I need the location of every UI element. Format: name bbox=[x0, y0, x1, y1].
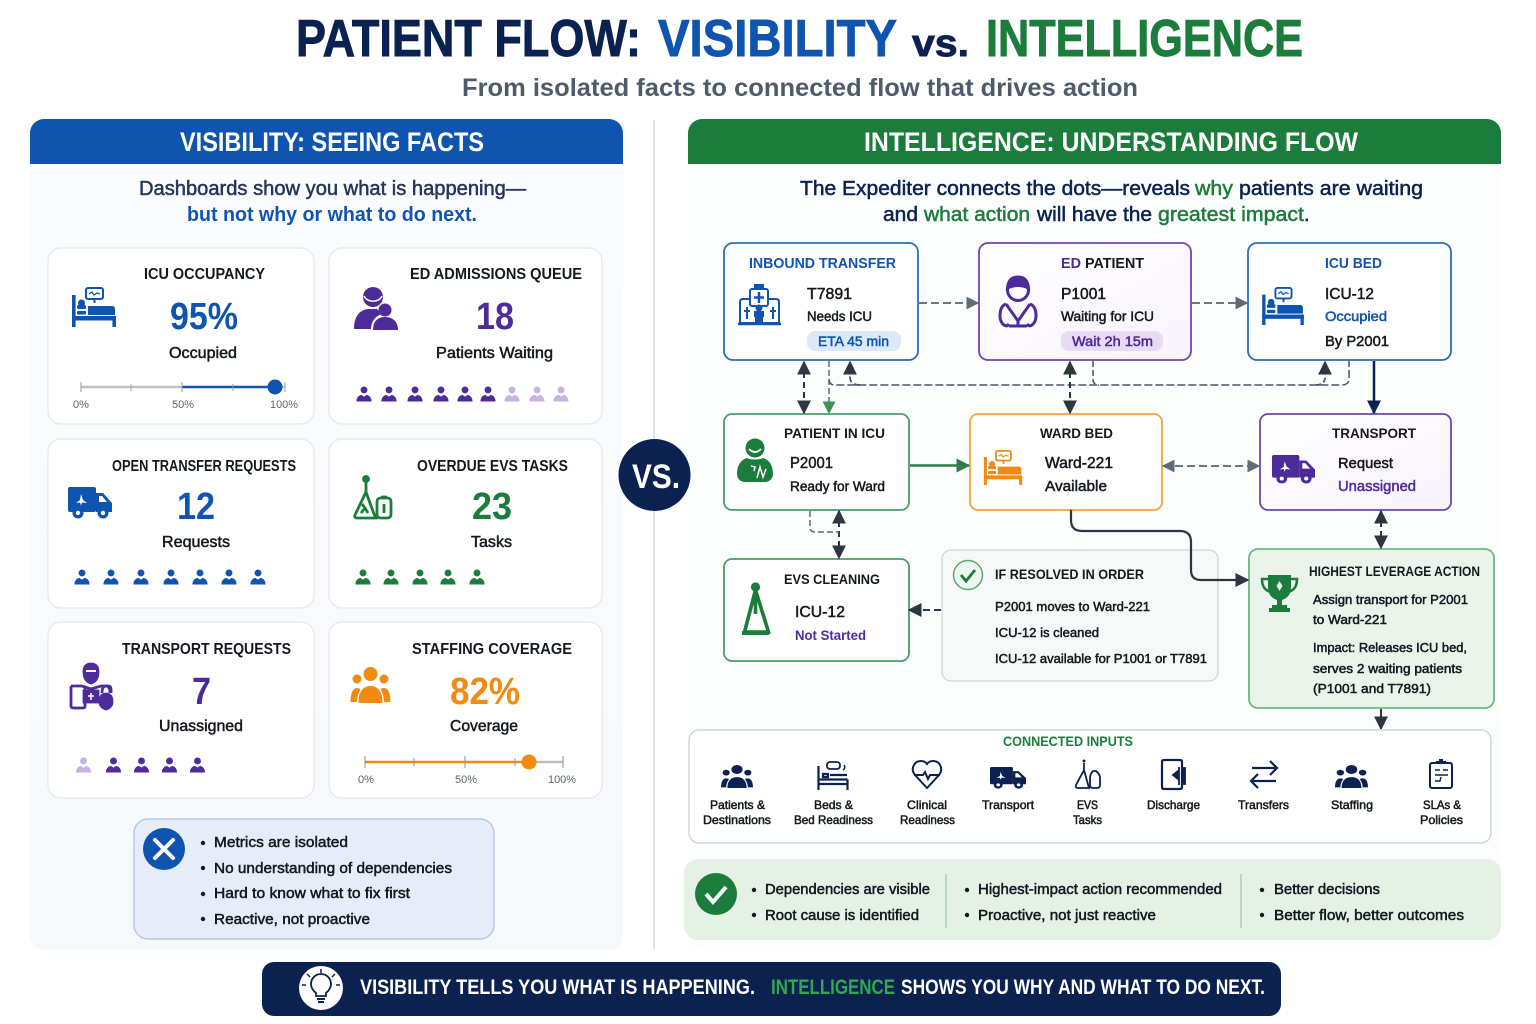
icon: green check bbox=[695, 873, 737, 915]
input: beds and bed readiness: Beds & bbox=[814, 798, 853, 812]
card: transport requests: Unassigned bbox=[159, 718, 243, 735]
node: patient in ICU: P2001 bbox=[790, 455, 833, 472]
card: transport requests bbox=[48, 622, 314, 798]
card: overdue EVS tasks: OVERDUE EVS TASKS bbox=[417, 458, 568, 475]
visibility header bbox=[30, 119, 623, 164]
callout: if resolved in order: P2001 moves to Ward-221 bbox=[995, 599, 1150, 614]
pill: wait time bbox=[1061, 331, 1163, 351]
title: VISIBILITY bbox=[658, 10, 897, 68]
node: transport: Unassigned bbox=[1338, 478, 1416, 495]
subtitle: From isolated facts to connected flow that drives action bbox=[462, 74, 1138, 102]
card: ICU occupancy: ICU OCCUPANCY bbox=[144, 266, 265, 283]
callout: limitations of visibility: Metrics are isolated bbox=[214, 834, 348, 851]
footer banner bbox=[262, 962, 1281, 1016]
arrows: dependency connectors bbox=[804, 303, 1381, 729]
panel: connected inputs: CONNECTED INPUTS bbox=[1003, 733, 1133, 749]
card: transport requests: 7 bbox=[192, 671, 211, 713]
coverage slider: 100% bbox=[548, 774, 576, 786]
icon: bed bbox=[1262, 287, 1304, 325]
coverage slider bbox=[358, 754, 576, 786]
intelligence intro text: greatest impact bbox=[1158, 204, 1304, 226]
panel: intelligence benefits bbox=[684, 859, 1501, 940]
panel: intelligence benefits: Better flow, better outcomes bbox=[1274, 907, 1464, 924]
node: ICU bed: ICU BED bbox=[1325, 255, 1382, 272]
title: INTELLIGENCE bbox=[986, 10, 1303, 68]
icon: check circle bbox=[954, 560, 982, 590]
panel: intelligence benefits: Highest-impact action recommended bbox=[978, 881, 1222, 898]
card: transport requests: TRANSPORT REQUESTS bbox=[122, 641, 291, 658]
callout: if resolved in order: ICU-12 available for P1001 or T7891 bbox=[995, 651, 1207, 666]
coverage slider: 0% bbox=[358, 774, 374, 786]
footer banner: VISIBILITY TELLS YOU WHAT IS HAPPENING. bbox=[360, 976, 755, 999]
card: ICU occupancy: Occupied bbox=[169, 345, 237, 362]
node: patient in ICU: Ready for Ward bbox=[790, 478, 885, 494]
title: vs. bbox=[912, 23, 969, 65]
intelligence header: INTELLIGENCE: UNDERSTANDING FLOW bbox=[864, 127, 1358, 157]
input: SLAs and policies: SLAs & bbox=[1423, 798, 1461, 812]
card: overdue EVS tasks bbox=[329, 439, 602, 608]
node: transport: TRANSPORT bbox=[1332, 425, 1416, 441]
VS badge bbox=[618, 439, 690, 511]
node: ICU bed bbox=[1248, 243, 1451, 360]
input: SLAs and policies: Policies bbox=[1420, 813, 1463, 827]
node: patient in ICU bbox=[724, 414, 909, 510]
icon: staff bbox=[350, 667, 390, 703]
icon: patients bbox=[354, 287, 398, 330]
intelligence header bbox=[688, 119, 1501, 164]
callout: highest leverage action: to Ward-221 bbox=[1313, 612, 1387, 627]
callout: if resolved in order: ICU-12 is cleaned bbox=[995, 625, 1099, 640]
callout: if resolved in order bbox=[942, 550, 1218, 681]
input: transport: Transport bbox=[982, 798, 1035, 812]
transport person icons bbox=[76, 757, 205, 773]
input: beds and bed readiness: Bed Readiness bbox=[794, 813, 873, 827]
icon: ICU patient bbox=[737, 438, 773, 482]
icon: ICU bed bbox=[72, 287, 116, 327]
node: inbound transfer: T7891 bbox=[807, 286, 852, 303]
input: discharge: Discharge bbox=[1147, 798, 1200, 812]
node: EVS cleaning: ICU-12 bbox=[795, 604, 845, 621]
input: EVS tasks: Tasks bbox=[1073, 813, 1102, 827]
icon: ED patient bbox=[1000, 277, 1036, 326]
footer banner: SHOWS YOU WHY AND WHAT TO DO NEXT. bbox=[901, 976, 1265, 999]
callout: if resolved in order: IF RESOLVED IN ORDER bbox=[995, 566, 1144, 582]
node: ICU bed: ICU-12 bbox=[1325, 286, 1374, 303]
occupancy slider: 0% bbox=[73, 399, 89, 411]
node: EVS cleaning: Not Started bbox=[795, 627, 866, 643]
node: ED patient: Waiting for ICU bbox=[1061, 308, 1154, 324]
icon: light bulb bbox=[299, 966, 343, 1010]
intelligence intro text: what action bbox=[923, 204, 1030, 226]
card: ED admissions queue: ED ADMISSIONS QUEUE bbox=[410, 266, 582, 283]
node: EVS cleaning: EVS CLEANING bbox=[784, 571, 880, 587]
node: ICU bed: Occupied bbox=[1325, 308, 1387, 324]
panel: intelligence benefits: Better decisions bbox=[1274, 881, 1380, 898]
callout: highest leverage action: Impact: Releases ICU bed, bbox=[1313, 640, 1467, 655]
pill: ETA: ETA 45 min bbox=[818, 333, 889, 349]
input: staffing: Staffing bbox=[1331, 798, 1373, 812]
card: ED admissions queue: 18 bbox=[476, 296, 514, 338]
input: beds and bed readiness bbox=[794, 762, 873, 827]
icon: transport truck bbox=[1272, 455, 1315, 484]
intelligence intro text: why bbox=[1194, 178, 1233, 200]
card: open transfer requests: Requests bbox=[162, 534, 230, 551]
callout: highest leverage action: Assign transport for P2001 bbox=[1313, 592, 1468, 607]
panel: intelligence benefits: Proactive, not just reactive bbox=[978, 907, 1156, 924]
node: EVS cleaning bbox=[724, 559, 909, 661]
intelligence intro text: and bbox=[883, 204, 918, 226]
node: inbound transfer: INBOUND TRANSFER bbox=[749, 255, 896, 272]
icon: cleaning supplies bbox=[355, 476, 391, 518]
card: staffing coverage: Coverage bbox=[450, 718, 518, 735]
occupancy slider: 100% bbox=[270, 399, 298, 411]
panel: connected inputs bbox=[689, 730, 1491, 843]
callout: highest leverage action: HIGHEST LEVERAGE ACTION bbox=[1309, 563, 1480, 579]
icon: ambulance bbox=[68, 487, 112, 518]
card: ICU occupancy bbox=[48, 248, 314, 424]
card: staffing coverage: 82% bbox=[450, 671, 520, 713]
input: discharge bbox=[1147, 760, 1200, 812]
input: transfers bbox=[1238, 761, 1289, 812]
card: ED admissions queue bbox=[329, 248, 602, 424]
input: patients and destinations: Patients & bbox=[710, 798, 765, 812]
visibility intro text: Dashboards show you what is happening— bbox=[139, 178, 526, 200]
occupancy slider: 50% bbox=[172, 399, 194, 411]
node: ward bed: Ward-221 bbox=[1045, 455, 1113, 472]
card: staffing coverage bbox=[329, 622, 602, 798]
card: open transfer requests bbox=[48, 439, 314, 608]
card: overdue EVS tasks: 23 bbox=[472, 486, 512, 528]
panel: intelligence benefits: Root cause is identified bbox=[765, 907, 919, 924]
card: overdue EVS tasks: Tasks bbox=[471, 534, 512, 551]
occupancy slider bbox=[73, 380, 298, 411]
title: PATIENT FLOW: bbox=[296, 10, 641, 68]
request icons bbox=[74, 569, 266, 585]
callout: limitations of visibility: No understanding of dependencies bbox=[214, 860, 452, 877]
node: ICU bed: By P2001 bbox=[1325, 333, 1389, 350]
icon: ward bed bbox=[984, 450, 1022, 485]
icon: transporter bbox=[71, 664, 112, 709]
callout: limitations of visibility bbox=[134, 819, 494, 939]
visibility intro text: but not why or what to do next. bbox=[187, 204, 477, 226]
title bbox=[296, 10, 1303, 68]
intelligence intro text: patients are waiting bbox=[1239, 178, 1423, 200]
panel: intelligence bbox=[684, 119, 1501, 950]
node: inbound transfer: Needs ICU bbox=[807, 308, 872, 324]
input: patients and destinations bbox=[703, 765, 771, 827]
input: clinical readiness: Readiness bbox=[900, 813, 955, 827]
pill: wait time: Wait 2h 15m bbox=[1072, 333, 1153, 349]
callout: highest leverage action: serves 2 waiting patients bbox=[1313, 661, 1463, 676]
input: staffing bbox=[1331, 765, 1373, 812]
callout: highest leverage action: (P1001 and T7891) bbox=[1313, 681, 1431, 696]
icon: EVS cone bbox=[742, 584, 769, 633]
card: staffing coverage: STAFFING COVERAGE bbox=[412, 641, 572, 658]
input: SLAs and policies bbox=[1420, 759, 1463, 827]
node: transport: Request bbox=[1338, 455, 1394, 472]
node: ED patient: P1001 bbox=[1061, 286, 1106, 303]
node: ED patient: ED bbox=[1061, 255, 1081, 272]
input: clinical readiness: Clinical bbox=[907, 798, 947, 812]
VS badge: VS. bbox=[632, 458, 680, 496]
node: ED patient: PATIENT bbox=[1085, 255, 1144, 272]
card: ICU occupancy: 95% bbox=[170, 296, 238, 338]
panel: visibility bbox=[30, 119, 623, 950]
visibility header: VISIBILITY: SEEING FACTS bbox=[180, 127, 484, 157]
input: patients and destinations: Destinations bbox=[703, 813, 771, 827]
callout: limitations of visibility: Reactive, not proactive bbox=[214, 911, 370, 928]
callout: limitations of visibility: Hard to know what to fix first bbox=[214, 885, 411, 902]
icon: X mark bbox=[143, 828, 185, 870]
node: inbound transfer bbox=[724, 243, 918, 360]
node: ward bed: Available bbox=[1045, 478, 1107, 495]
node: ED patient bbox=[979, 243, 1191, 360]
coverage slider: 50% bbox=[455, 774, 477, 786]
card: open transfer requests: OPEN TRANSFER REQUESTS bbox=[112, 458, 296, 475]
card: open transfer requests: 12 bbox=[177, 486, 215, 528]
node: transport bbox=[1260, 414, 1451, 510]
icon: trophy bbox=[1262, 575, 1297, 612]
panel: intelligence benefits: Dependencies are visible bbox=[765, 881, 930, 898]
node: ward bed bbox=[970, 414, 1162, 510]
footer banner: INTELLIGENCE bbox=[771, 976, 895, 999]
callout: highest leverage action bbox=[1249, 549, 1494, 708]
input: transfers: Transfers bbox=[1238, 798, 1289, 812]
intelligence intro text: The Expediter connects the dots—reveals bbox=[800, 178, 1190, 200]
input: transport bbox=[982, 767, 1035, 812]
card: ED admissions queue: Patients Waiting bbox=[436, 345, 553, 362]
pill: ETA bbox=[807, 331, 901, 351]
input: EVS tasks: EVS bbox=[1077, 798, 1098, 812]
input: EVS tasks bbox=[1073, 760, 1102, 827]
divider line bbox=[653, 120, 655, 950]
node: ward bed: WARD BED bbox=[1040, 425, 1113, 441]
visibility intro text bbox=[139, 178, 526, 226]
icon: hospital bbox=[738, 285, 781, 324]
intelligence intro text: . bbox=[1304, 204, 1310, 226]
node: patient in ICU: PATIENT IN ICU bbox=[784, 425, 885, 441]
intelligence intro text: will have the bbox=[1036, 204, 1152, 226]
patient icons bbox=[356, 386, 569, 402]
task icons bbox=[355, 569, 485, 585]
intelligence intro text bbox=[800, 178, 1423, 226]
input: clinical readiness bbox=[900, 761, 955, 827]
